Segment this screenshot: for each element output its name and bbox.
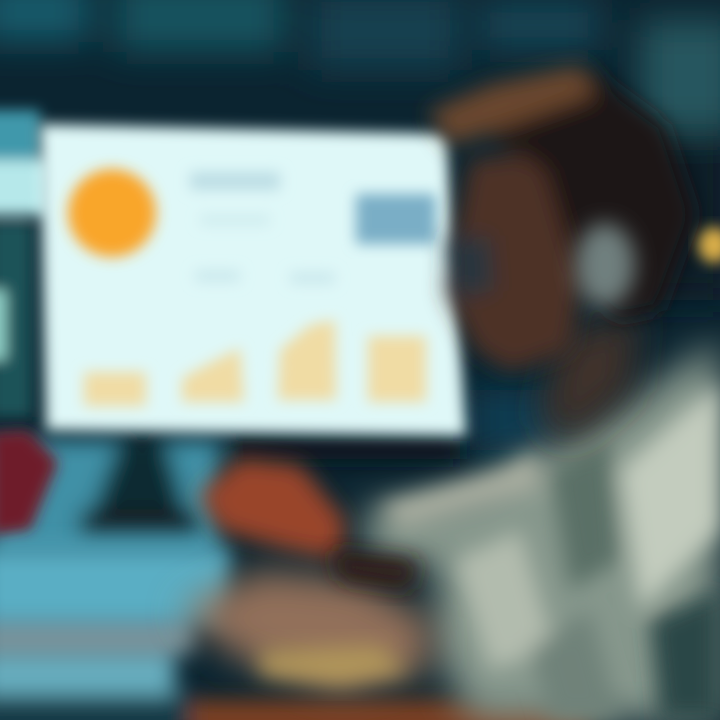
person: neck and head	[428, 65, 720, 440]
keyboard and desk surface	[0, 548, 590, 720]
headphone	[575, 223, 635, 307]
bar chart	[84, 320, 426, 406]
person: shirt	[360, 340, 720, 720]
monitor stand and desk	[0, 440, 460, 560]
panel: dashboard screen	[40, 124, 466, 436]
person: hands and forearm	[180, 458, 430, 690]
callout: blue label	[356, 194, 436, 244]
icon: orange circle	[68, 169, 156, 257]
left secondary screen	[0, 110, 50, 417]
yellow background light	[698, 227, 720, 263]
heading placeholder lines	[190, 172, 335, 284]
icon: red object on desk	[0, 430, 58, 536]
